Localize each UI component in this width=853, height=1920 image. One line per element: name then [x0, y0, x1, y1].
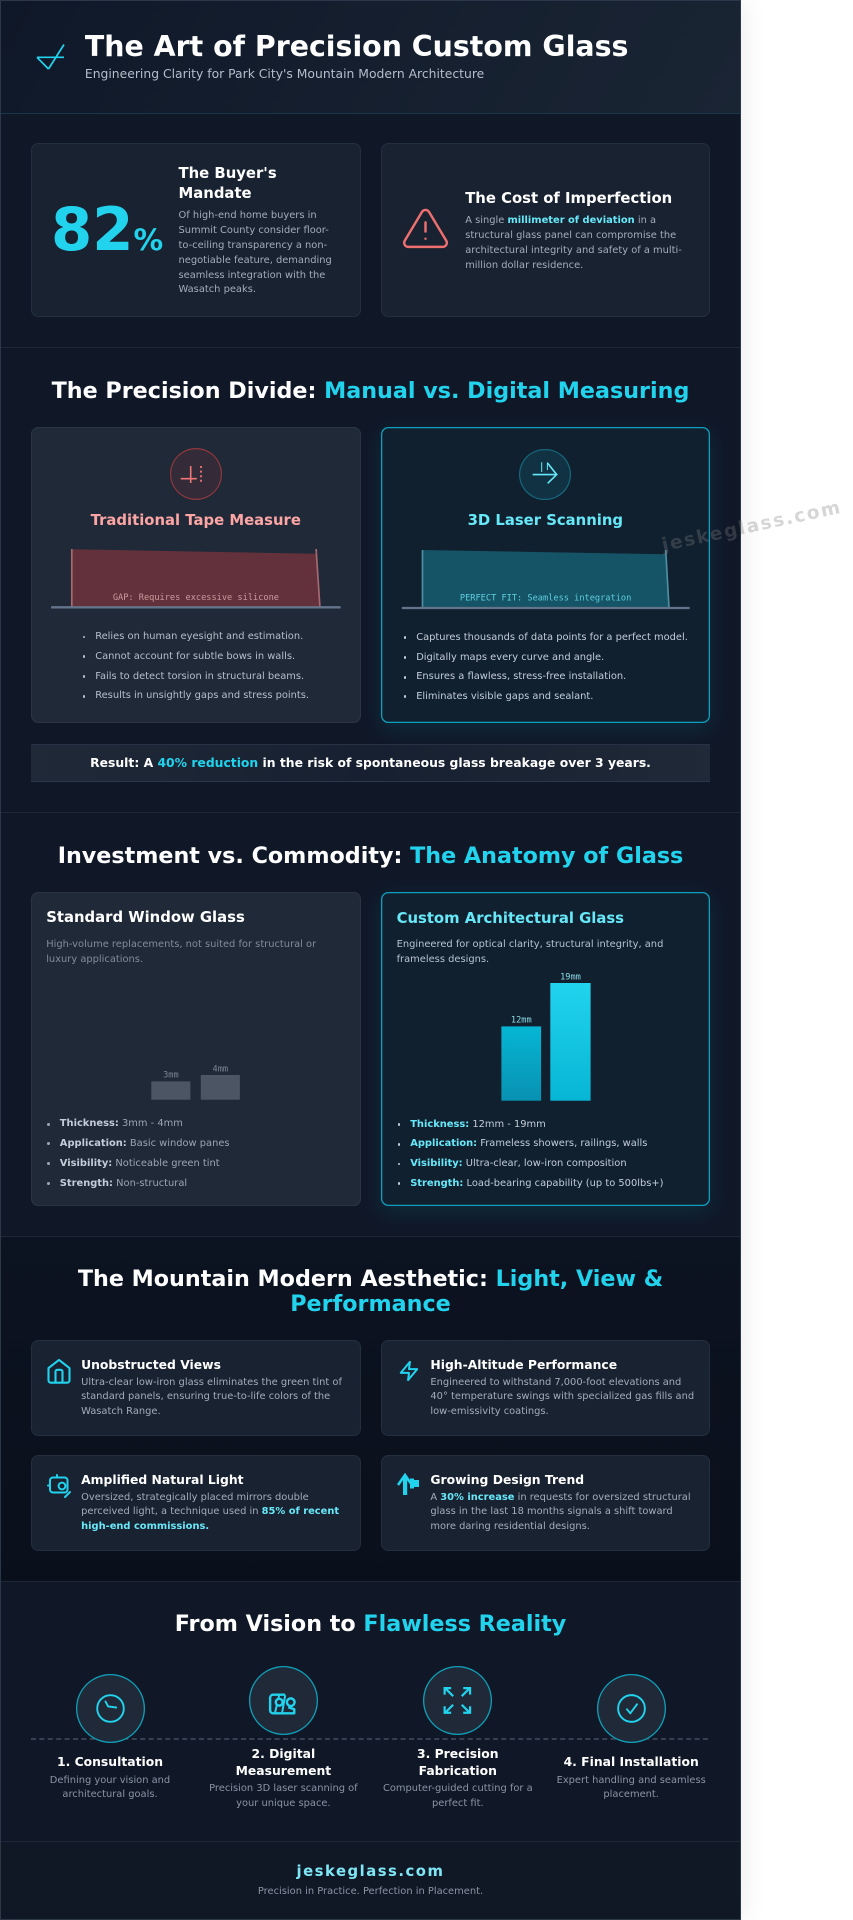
text: natural light description: Oversized, strategically placed mirrors double: [81, 1492, 309, 1503]
text: custom glass description: Engineered for optical clarity, structural integrity, and: [397, 939, 663, 950]
icon: mirror camera: [47, 1474, 71, 1498]
heading: growing design trend: Growing Design Trend: [430, 1473, 584, 1487]
diagram: perfect fit illustration: PERFECT FIT: Seamless integration: [460, 594, 631, 604]
heading: the buyer's mandate: Mandate: [178, 185, 252, 202]
watermark: jeskeglass.com: [660, 497, 844, 556]
text: step 4 description: Expert handling and seamless: [557, 1775, 706, 1786]
panel: standard window glass: [31, 892, 360, 1206]
step: consultation: [50, 1674, 170, 1800]
text: step 2 title: [236, 1747, 331, 1778]
text: natural light description: perceived light, a technique used in 85% of recent: [81, 1506, 339, 1517]
list: tape measure drawbacks: Cannot account for subtle bows in walls.: [95, 651, 295, 662]
heading: mountain modern aesthetic: Performance: [290, 1291, 451, 1317]
icon: warning triangle: [402, 208, 448, 248]
panel: growing design trend: [381, 1455, 710, 1551]
heading: precision divide: The Precision Divide: Manual vs. Digital Measuring: [52, 378, 689, 404]
step: digital measurement: [209, 1666, 358, 1809]
text: step 3 title: 3. Precision: [417, 1747, 499, 1761]
heading: amplified natural light: Amplified Natural Light: [81, 1473, 244, 1487]
text: design trend description: [430, 1492, 691, 1532]
panel: amplified natural light: [31, 1455, 360, 1551]
text: standard glass description: High-volume replacements, not suited for structural or: [46, 939, 316, 950]
text: buyer's mandate description: Summit County consider floor-: [178, 225, 329, 236]
list: tape measure drawbacks: Results in unsightly gaps and stress points.: [95, 690, 309, 701]
heading: mountain modern aesthetic: The Mountain Modern Aesthetic: Light, View &: [78, 1266, 663, 1292]
text: custom glass description: frameless designs.: [397, 954, 489, 965]
list: laser scanning benefits: Captures thousands of data points for a perfect model.: [416, 632, 688, 643]
section: process timeline: [0, 1582, 741, 1842]
text: buyer's mandate description: seamless integration with the: [178, 270, 325, 281]
text: unobstructed views description: standard panels, ensuring true-to-life colors of the: [81, 1391, 330, 1402]
heading: mountain modern aesthetic: [78, 1266, 663, 1317]
text: step 3 description: perfect fit.: [432, 1798, 484, 1809]
chart: custom thickness bars: 12mm: [511, 1016, 531, 1026]
heading: investment vs commodity: Investment vs. Commodity: The Anatomy of Glass: [58, 842, 683, 868]
diagram: gap illustration: GAP: Requires excessive silicone: [113, 593, 279, 603]
text: step 1 description: [50, 1775, 170, 1800]
text: natural light description: [81, 1492, 339, 1532]
title: The Art of Precision Custom Glass: [85, 30, 628, 62]
text: standard glass description: luxury applications.: [46, 954, 143, 965]
text: natural light description: high-end commissions.: [81, 1521, 209, 1532]
list: standard glass specs: Visibility: Noticeable green tint: [60, 1158, 220, 1169]
callout: result banner: Result: A 40% reduction in the risk of spontaneous glass breakage over 3 years.: [90, 756, 651, 770]
list: laser scanning benefits: Digitally maps every curve and angle.: [416, 652, 604, 663]
text: step 4 title: 4. Final Installation: [564, 1755, 699, 1769]
text: cost description: A single millimeter of deviation in a: [465, 215, 656, 226]
text: design trend description: A 30% increase in requests for oversized structural: [430, 1492, 691, 1503]
footer: website: jeskeglass.com: [297, 1863, 444, 1880]
stat: 82 percent: 82%: [51, 195, 163, 264]
text: step 2 title: 2. Digital: [252, 1747, 315, 1761]
chart: standard thickness bars: 3mm: [163, 1071, 179, 1081]
chart: standard thickness bars: 4mm: [213, 1065, 228, 1075]
chart: custom thickness bars: 19mm: [560, 973, 581, 983]
text: cost description: million dollar residence.: [465, 260, 583, 271]
text: step 3 description: [383, 1783, 533, 1809]
heading: traditional tape measure: Traditional Tape Measure: [91, 512, 301, 528]
subtitle: Engineering Clarity for Park City's Mountain Modern Architecture: [85, 67, 484, 81]
heading: the buyer's mandate: [178, 165, 277, 202]
list: standard glass specs: Strength: Non-structural: [60, 1178, 187, 1189]
text: step 3 title: Fabrication: [419, 1764, 497, 1778]
text: cost description: structural glass panel can compromise the: [465, 230, 676, 241]
text: step 2 description: [209, 1783, 358, 1809]
heading: cost of imperfection: The Cost of Imperfection: [465, 190, 672, 207]
text: step 2 title: Measurement: [236, 1764, 331, 1778]
text: step 3 title: [417, 1747, 499, 1778]
text: standard glass description: [46, 939, 316, 965]
heading: the buyer's mandate: The Buyer's: [178, 165, 277, 182]
text: step 4 description: [557, 1775, 706, 1800]
section: intro stats: [0, 114, 741, 348]
panel: unobstructed views: [31, 1340, 360, 1436]
icon: lightning bolt: [400, 1360, 418, 1382]
list: standard glass specs: Application: Basic window panes: [60, 1138, 230, 1149]
text: high-altitude description: low-emissivity coatings.: [430, 1406, 549, 1417]
footer: [0, 1842, 741, 1920]
diagram: gap illustration: [51, 549, 341, 608]
timeline: dashed connector: [31, 1738, 708, 1740]
section: anatomy of glass: [0, 813, 741, 1237]
text: buyer's mandate description: [178, 210, 332, 295]
text: design trend description: glass in the last 18 months signals a shift toward: [430, 1506, 673, 1517]
callout: result banner: [31, 744, 710, 782]
icon: clock: [76, 1674, 144, 1743]
icon: check circle: [597, 1674, 666, 1743]
text: unobstructed views description: Ultra-clear low-iron glass eliminates the green tint of: [81, 1377, 342, 1388]
icon: expand arrows: [423, 1666, 492, 1734]
text: buyer's mandate description: Wasatch peaks.: [178, 284, 256, 295]
heading: unobstructed views: Unobstructed Views: [81, 1358, 221, 1372]
heading: standard window glass: Standard Window Glass: [46, 909, 245, 926]
chart: standard thickness bars: [151, 1065, 240, 1100]
step: final installation: [557, 1674, 706, 1800]
text: high-altitude description: 40° temperature swings with specialized gas fills and: [430, 1391, 694, 1402]
header: [0, 0, 741, 114]
text: high-altitude description: Engineered to withstand 7,000-foot elevations and: [430, 1377, 681, 1388]
text: custom glass description: [396, 939, 663, 965]
text: design trend description: more daring residential designs.: [430, 1521, 590, 1532]
text: cost description: [465, 215, 682, 271]
panel: high-altitude performance: [381, 1340, 710, 1436]
text: unobstructed views description: [81, 1377, 342, 1417]
icon: upward trend arrow: [397, 1472, 419, 1495]
text: cost description: architectural integrity and safety of a multi-: [465, 245, 682, 256]
text: high-altitude description: [430, 1377, 694, 1417]
list: tape measure drawbacks: Relies on human eyesight and estimation.: [95, 631, 303, 642]
list: custom glass specs: [398, 1119, 664, 1189]
list: standard glass specs: [47, 1118, 230, 1189]
panel: traditional tape measure: [31, 427, 360, 723]
text: step 1 description: architectural goals.: [62, 1789, 158, 1800]
list: custom glass specs: Thickness: 12mm - 19mm: [410, 1119, 546, 1130]
list: laser scanning benefits: [404, 632, 688, 702]
panel: buyer's mandate: [31, 143, 360, 317]
list: standard glass specs: Thickness: 3mm - 4mm: [60, 1118, 183, 1129]
section: mountain modern aesthetic: [0, 1237, 741, 1582]
list: tape measure drawbacks: [83, 631, 309, 701]
list: laser scanning benefits: Eliminates visible gaps and sealant.: [416, 691, 593, 702]
heading: 3D laser scanning: 3D Laser Scanning: [468, 512, 623, 529]
footer: tagline: Precision in Practice. Perfection in Placement.: [258, 1886, 483, 1897]
list: custom glass specs: Strength: Load-bearing capability (up to 500lbs+): [410, 1178, 664, 1189]
text: step 2 description: your unique space.: [236, 1798, 331, 1809]
list: custom glass specs: Visibility: Ultra-clear, low-iron composition: [410, 1158, 627, 1169]
heading: high-altitude performance: High-Altitude Performance: [430, 1358, 617, 1372]
icon: laser scan: [519, 449, 571, 500]
section: precision divide: [0, 348, 741, 813]
text: unobstructed views description: Wasatch Range.: [81, 1406, 161, 1417]
text: step 3 description: Computer-guided cutting for a: [383, 1783, 533, 1794]
heading: custom architectural glass: Custom Architectural Glass: [397, 910, 624, 927]
text: step 4 description: placement.: [603, 1789, 659, 1800]
icon: house: [47, 1358, 71, 1384]
list: custom glass specs: Application: Frameless showers, railings, walls: [410, 1138, 647, 1149]
icon: glass logo: [36, 44, 65, 70]
text: step 1 title: 1. Consultation: [57, 1755, 163, 1769]
panel: custom architectural glass: [381, 892, 710, 1206]
step: precision fabrication: [383, 1666, 533, 1809]
list: tape measure drawbacks: Fails to detect torsion in structural beams.: [95, 671, 304, 682]
panel: 3D laser scanning: [381, 427, 710, 723]
text: buyer's mandate description: to-ceiling transparency a non-: [178, 240, 327, 251]
text: buyer's mandate description: Of high-end home buyers in: [178, 210, 317, 221]
panel: cost of imperfection: [381, 143, 710, 317]
heading: from vision to flawless reality: From Vision to Flawless Reality: [175, 1611, 566, 1637]
diagram: perfect fit illustration: [402, 550, 690, 610]
icon: scanner: [249, 1666, 318, 1734]
text: step 1 description: Defining your vision and: [50, 1775, 170, 1786]
text: buyer's mandate description: negotiable feature, demanding: [178, 255, 332, 266]
chart: custom thickness bars: [501, 973, 591, 1101]
text: step 2 description: Precision 3D laser scanning of: [209, 1783, 358, 1794]
list: laser scanning benefits: Ensures a flawless, stress-free installation.: [416, 671, 626, 682]
icon: tape measure: [170, 448, 222, 500]
